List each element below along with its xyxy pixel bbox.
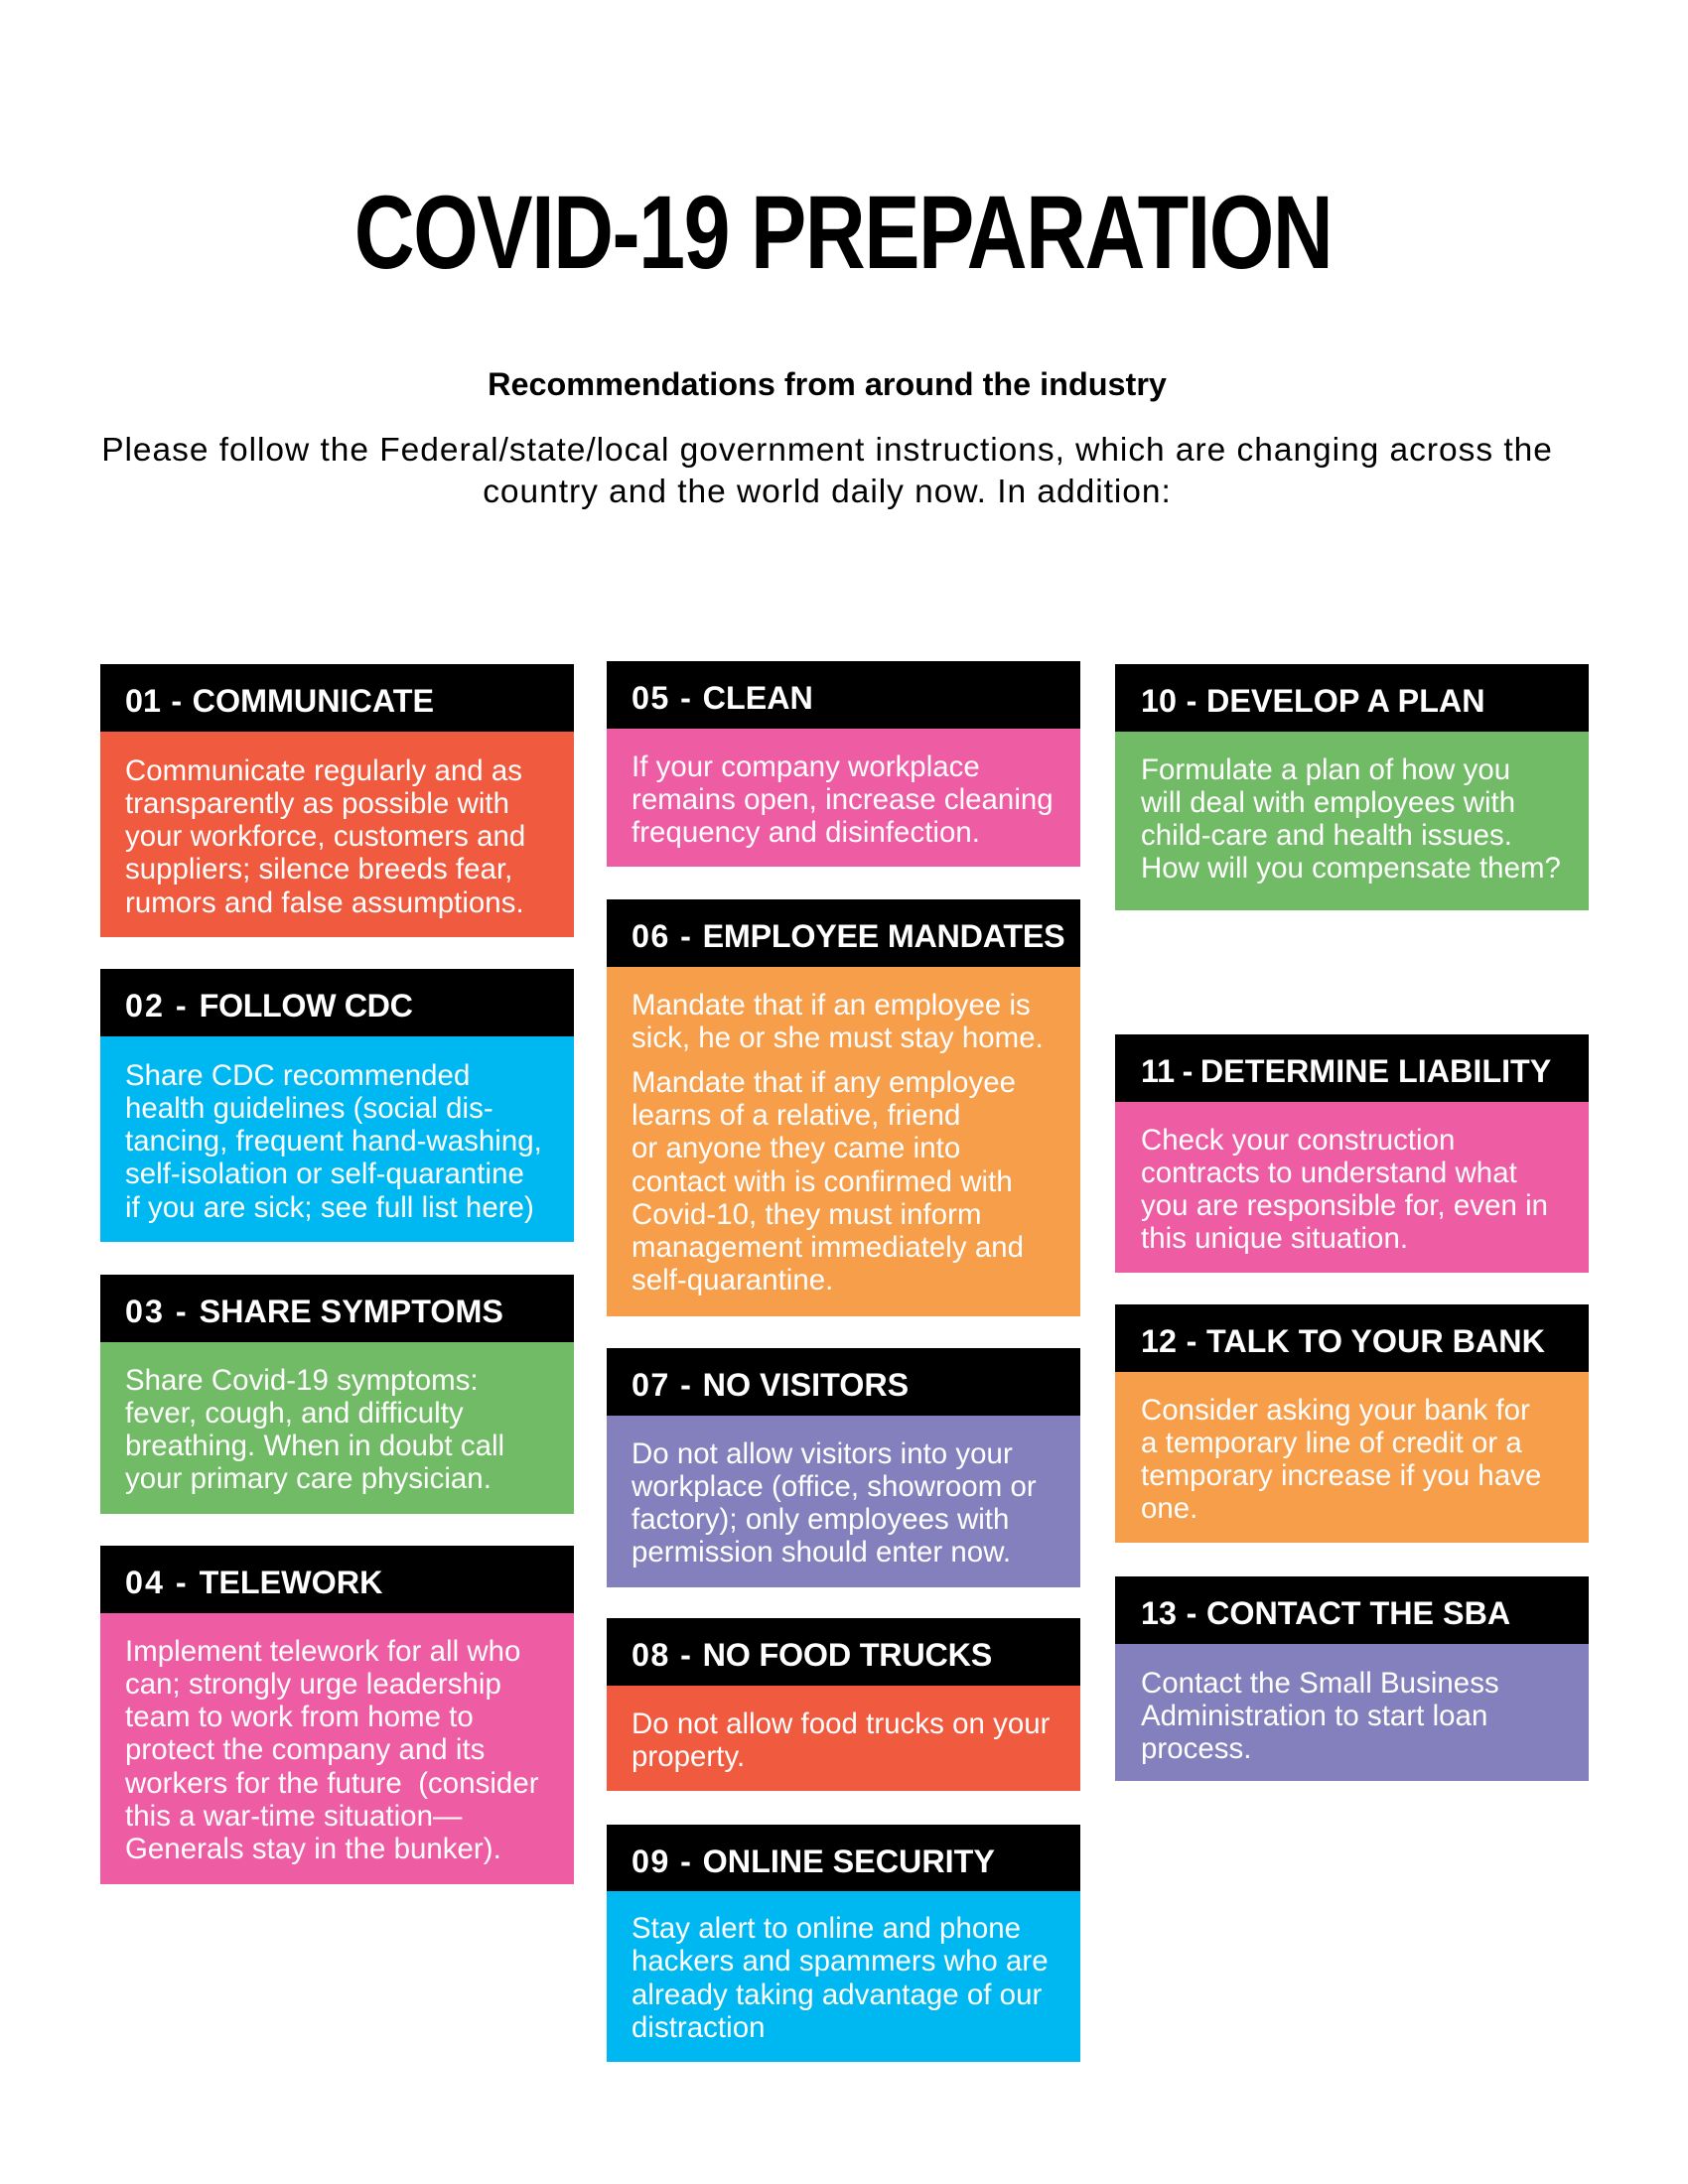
panel: 12 talk to your bank (1115, 1304, 1589, 1543)
text: 05 clean: frequency and disinfection. (632, 816, 980, 849)
text: 12 talk to your bank: a temporary line of credit or a (1141, 1427, 1522, 1459)
text: 09 online security: already taking advantage of our (632, 1979, 1042, 2011)
text: 05 clean (607, 729, 1080, 867)
panel: 03 share symptoms (100, 1275, 574, 1514)
text: 06 employee mandates: sick, he or she must stay home. (632, 1022, 1044, 1054)
text: 04 telework: protect the company and its (125, 1733, 485, 1766)
heading: 10 develop a plan: 10 - DEVELOP A PLAN (1141, 683, 1485, 719)
text: 04 telework: Implement telework for all who (125, 1634, 520, 1668)
heading: 01 communicate (100, 664, 574, 731)
text: 06 employee mandates: learns of a relative, friend (632, 1099, 960, 1132)
heading: 13 contact the sba: 13 - CONTACT THE SBA (1141, 1595, 1510, 1631)
heading: 02 follow cdc (100, 969, 574, 1036)
heading: 13 contact the sba (1115, 1576, 1589, 1644)
heading: 07 no visitors (607, 1348, 1080, 1416)
title: COVID-19 PREPARATION (354, 175, 1332, 291)
text: 02 follow cdc: self-isolation or self-quarantine (125, 1158, 524, 1190)
text: 13 contact the sba: process. (1141, 1732, 1251, 1765)
text: 06 employee mandates: self-quarantine. (632, 1264, 833, 1297)
text: 09 online security: hackers and spammers who are (632, 1945, 1049, 1978)
text: 06 employee mandates: Covid-10, they must inform (632, 1198, 981, 1231)
text: 06 employee mandates: contact with is confirmed with (632, 1165, 1013, 1198)
text: 01 communicate: transparently as possible with (125, 787, 509, 820)
panel: 02 follow cdc (100, 969, 574, 1242)
text: 04 telework: team to work from home to (125, 1701, 474, 1733)
heading: 09 online security (607, 1825, 1080, 1891)
text: 10 develop a plan: child-care and health issues. (1141, 819, 1512, 852)
text: 06 employee mandates: Mandate that if an employee is (632, 989, 1031, 1021)
text: 02 follow cdc: Share CDC recommended (125, 1058, 470, 1092)
heading: 12 talk to your bank (1115, 1304, 1589, 1372)
heading: 01 communicate: 01 - COMMUNICATE (125, 683, 434, 719)
text: 04 telework: can; strongly urge leadership (125, 1668, 501, 1701)
text: 03 share symptoms (100, 1342, 574, 1514)
text: 11 determine liability: you are responsible for, even in (1141, 1189, 1548, 1222)
panel: 13 contact the sba (1115, 1576, 1589, 1781)
heading: 10 develop a plan (1115, 664, 1589, 731)
text: 07 no visitors: permission should enter now. (632, 1536, 1011, 1569)
panel: 11 determine liability (1115, 1034, 1589, 1273)
text: 04 telework: this a war-time situation— (125, 1800, 462, 1833)
text: 02 follow cdc: tancing, frequent hand-washing, (125, 1125, 542, 1158)
text: 11 determine liability (1115, 1102, 1589, 1273)
heading: 02 follow cdc: 02 - FOLLOW CDC (125, 988, 413, 1024)
heading: 09 online security: 09 - ONLINE SECURITY (632, 1843, 995, 1878)
text: 10 develop a plan (1115, 731, 1589, 910)
text: 01 communicate: suppliers; silence breeds fear, (125, 853, 512, 886)
heading: 05 clean (607, 661, 1080, 729)
text: 12 talk to your bank: temporary increase if you have (1141, 1459, 1541, 1492)
panel: 05 clean (607, 661, 1080, 867)
text: 04 telework (100, 1612, 574, 1884)
text: 13 contact the sba: Contact the Small Business (1141, 1666, 1499, 1700)
text: 03 share symptoms: breathing. When in doubt call (125, 1430, 504, 1462)
text: 04 telework: Generals stay in the bunker). (125, 1833, 501, 1865)
panel: 08 no food trucks (607, 1618, 1080, 1791)
text: 13 contact the sba (1115, 1644, 1589, 1781)
text: 13 contact the sba: Administration to start loan (1141, 1700, 1487, 1732)
text: 06 employee mandates: or anyone they came into (632, 1132, 960, 1164)
heading: 08 no food trucks (607, 1618, 1080, 1686)
heading: 03 share symptoms: 03 - SHARE SYMPTOMS (125, 1294, 503, 1329)
intro text: Please follow the Federal/state/local government instructions, which are changing across the (101, 432, 1553, 469)
text: 09 online security: Stay alert to online and phone (632, 1912, 1021, 1945)
heading: 11 determine liability (1115, 1034, 1589, 1102)
text: 01 communicate: rumors and false assumptions. (125, 887, 524, 919)
text: 07 no visitors (607, 1416, 1080, 1587)
text: 07 no visitors: factory); only employees with (632, 1503, 1009, 1536)
text: 01 communicate: your workforce, customers and (125, 820, 525, 853)
text: 06 employee mandates (607, 967, 1080, 1316)
text: 10 develop a plan: How will you compensate them? (1141, 852, 1561, 885)
heading: 08 no food trucks: 08 - NO FOOD TRUCKS (632, 1637, 992, 1673)
text: 02 follow cdc (100, 1036, 574, 1242)
text: 11 determine liability: Check your construction (1141, 1124, 1455, 1156)
panel: 01 communicate (100, 664, 574, 937)
text: 09 online security: distraction (632, 2011, 766, 2044)
text: 10 develop a plan: Formulate a plan of how you (1141, 752, 1510, 786)
heading: 03 share symptoms (100, 1275, 574, 1342)
text: 05 clean: remains open, increase cleaning (632, 783, 1054, 816)
subtitle: Recommendations from around the industry (488, 366, 1167, 402)
intro text (101, 432, 1553, 510)
text: 02 follow cdc: if you are sick; see full list here) (125, 1191, 534, 1224)
text: 05 clean: If your company workplace (632, 751, 980, 782)
text: 12 talk to your bank: one. (1141, 1492, 1197, 1525)
heading: 04 telework (100, 1546, 574, 1612)
text: 03 share symptoms: your primary care physician. (125, 1462, 492, 1495)
text: 03 share symptoms: fever, cough, and difficulty (125, 1397, 464, 1430)
intro text: country and the world daily now. In addition: (483, 474, 1172, 510)
panel: 09 online security (607, 1825, 1080, 2062)
text: 08 no food trucks (607, 1686, 1080, 1791)
text: 10 develop a plan: will deal with employees with (1141, 786, 1515, 819)
text: 12 talk to your bank: Consider asking your bank for (1141, 1394, 1530, 1426)
text: 04 telework: workers for the future (consider (125, 1767, 539, 1800)
heading: 05 clean: 05 - CLEAN (632, 680, 813, 716)
text: 07 no visitors: Do not allow visitors into your (632, 1437, 1013, 1469)
heading: 04 telework: 04 - TELEWORK (125, 1565, 382, 1600)
text: 08 no food trucks: property. (632, 1740, 745, 1773)
heading: 11 determine liability: 11 - DETERMINE LIABILITY (1141, 1053, 1551, 1089)
panel: 10 develop a plan (1115, 664, 1589, 910)
heading: 07 no visitors: 07 - NO VISITORS (632, 1367, 909, 1403)
text: 11 determine liability: contracts to understand what (1141, 1157, 1517, 1189)
panel: 07 no visitors (607, 1348, 1080, 1587)
text: 12 talk to your bank (1115, 1372, 1589, 1543)
text: 02 follow cdc: health guidelines (social dis- (125, 1092, 493, 1125)
heading: 06 employee mandates: 06 - EMPLOYEE MANDATES (632, 918, 1064, 954)
text: 03 share symptoms: Share Covid-19 symptoms: (125, 1364, 479, 1396)
text: 06 employee mandates: Mandate that if any employee (632, 1066, 1016, 1099)
heading: 12 talk to your bank: 12 - TALK TO YOUR BANK (1141, 1323, 1545, 1359)
text: 06 employee mandates: management immediately and (632, 1231, 1024, 1264)
text: 08 no food trucks: Do not allow food trucks on your (632, 1707, 1050, 1739)
panel: 06 employee mandates (607, 899, 1080, 1316)
text: 07 no visitors: workplace (office, showroom or (632, 1470, 1037, 1503)
panel: 04 telework (100, 1546, 574, 1884)
text: 11 determine liability: this unique situation. (1141, 1222, 1408, 1255)
text: 01 communicate (100, 731, 574, 937)
text: 09 online security (607, 1891, 1080, 2062)
text: 01 communicate: Communicate regularly and as (125, 754, 522, 786)
heading: 06 employee mandates (607, 899, 1080, 967)
